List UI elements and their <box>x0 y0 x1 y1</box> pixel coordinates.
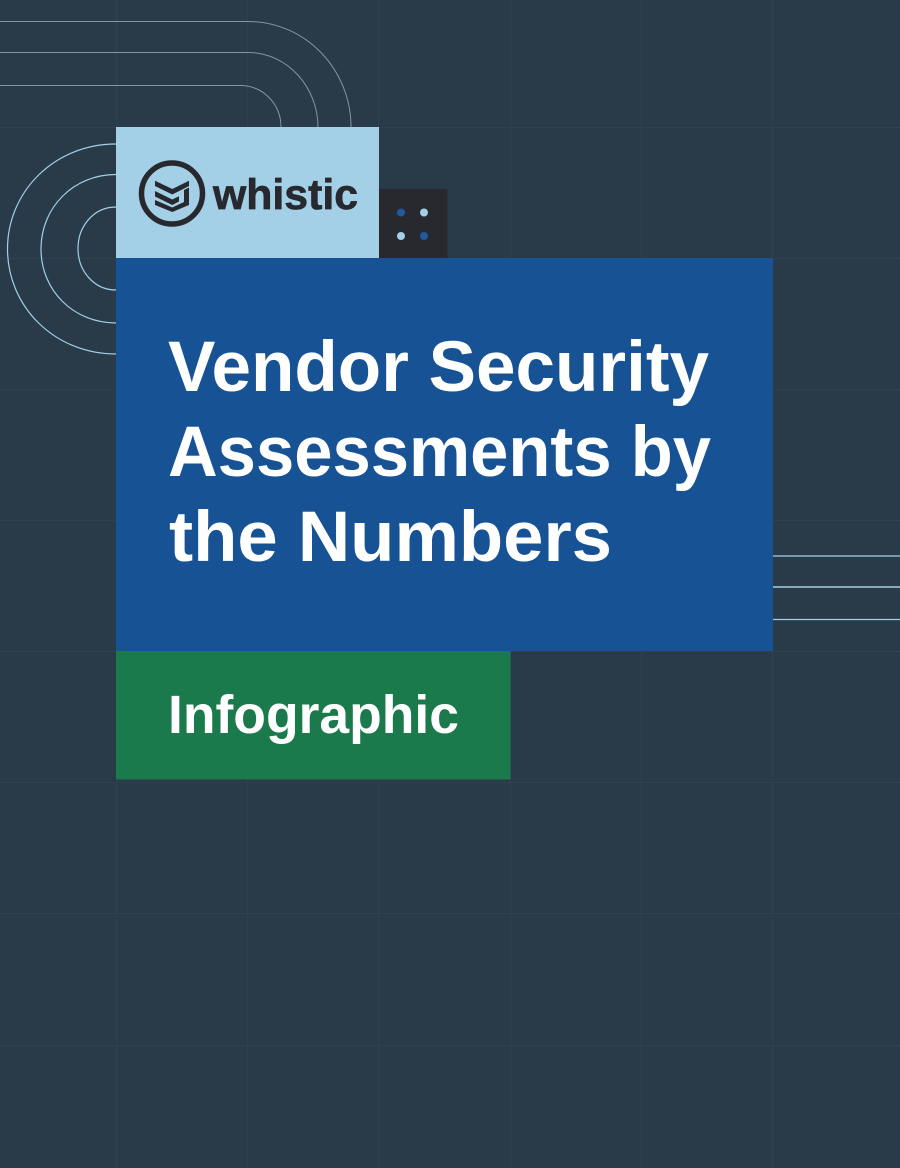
left concentric arcs <box>8 144 116 354</box>
title: Assessments by <box>168 413 711 492</box>
subtitle panel <box>116 651 510 780</box>
subtitle: Infographic <box>168 685 459 745</box>
title panel <box>116 258 773 651</box>
top curved lines <box>0 22 351 127</box>
title: the Numbers <box>169 498 612 577</box>
dots tile <box>379 189 448 258</box>
logo wordmark: whistic <box>212 171 358 219</box>
title <box>168 328 711 577</box>
title: Vendor Security <box>168 328 710 407</box>
icon: whistic shield logo <box>142 163 202 224</box>
logo panel <box>116 127 379 258</box>
right horizontal lines <box>773 556 900 620</box>
